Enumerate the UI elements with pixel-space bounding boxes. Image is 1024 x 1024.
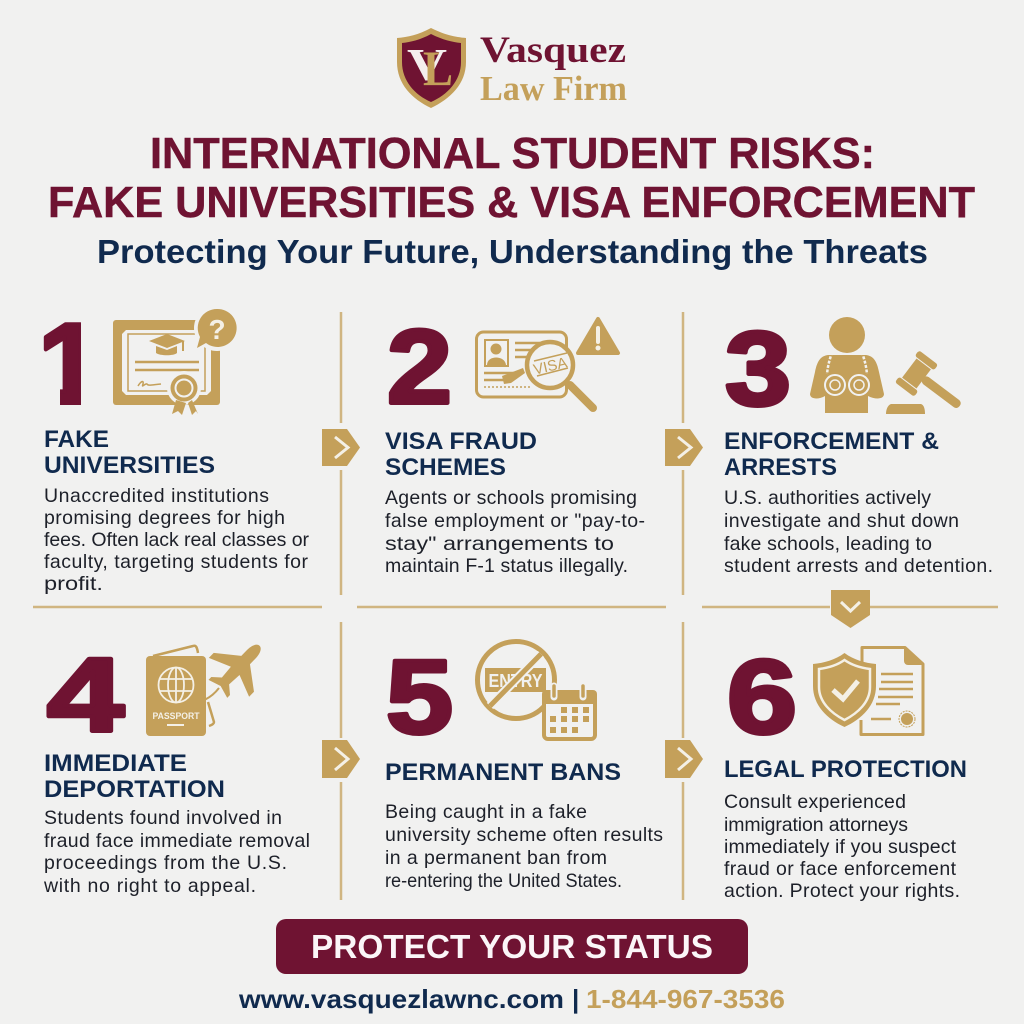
title: FAKE UNIVERSITIES & VISA ENFORCEMENT — [48, 178, 975, 227]
body text: in a permanent ban from — [385, 847, 607, 869]
panel: visa fraud schemes — [385, 309, 645, 577]
body text: fake schools, leading to — [724, 533, 932, 555]
number 5: 5 — [386, 639, 453, 756]
body text: student arrests and detention. — [724, 555, 993, 577]
body text — [724, 487, 993, 577]
brand name — [480, 30, 627, 108]
heading — [44, 426, 215, 479]
body text: fraud or face enforcement — [724, 858, 957, 880]
panel: fake universities — [38, 301, 310, 595]
heading: UNIVERSITIES — [44, 452, 215, 479]
body text: university scheme often results — [385, 824, 663, 846]
panel: enforcement and arrests — [724, 311, 993, 577]
body text: faculty, targeting students for — [44, 551, 308, 573]
number 6: 6 — [727, 639, 797, 756]
panel: legal protection — [724, 639, 967, 902]
body text: with no right to appeal. — [43, 875, 256, 897]
icon: no entry and calendar — [478, 642, 597, 739]
contact line: | — [572, 984, 579, 1014]
heading: PERMANENT BANS — [385, 759, 621, 786]
heading: ENFORCEMENT & — [724, 428, 939, 455]
body text: investigate and shut down — [724, 510, 959, 532]
body text — [724, 791, 960, 902]
icon: passport and plane: PASSPORT — [152, 711, 200, 721]
body text: promising degrees for high — [44, 507, 285, 529]
call to action button: PROTECT YOUR STATUS — [311, 928, 713, 965]
icon: diploma with question bubble: ? — [208, 314, 226, 345]
arrow: 1 to 2 — [322, 429, 360, 466]
body text: Being caught in a fake — [385, 801, 587, 823]
arrow: 5 to 6 — [665, 740, 703, 778]
icon: visa card and magnifier: VISA — [532, 354, 569, 379]
brand name: Law Firm — [480, 69, 627, 108]
body text: false employment or "pay-to- — [385, 510, 645, 532]
body text: re-entering the United States. — [385, 870, 622, 892]
arrow: 4 to 5 — [322, 740, 360, 778]
number 3: 3 — [725, 311, 791, 428]
heading: ARRESTS — [724, 454, 837, 481]
body text: maintain F-1 status illegally. — [385, 555, 628, 577]
logo — [397, 28, 627, 108]
icon: no entry and calendar: ENTRY — [488, 671, 542, 691]
body text: Agents or schools promising — [385, 487, 637, 509]
title: INTERNATIONAL STUDENT RISKS: — [150, 129, 875, 178]
contact line: www.vasquezlawnc.com — [238, 984, 564, 1014]
subtitle: Protecting Your Future, Understanding the Threats — [97, 233, 928, 270]
body text: immigration attorneys — [724, 814, 908, 836]
call to action button — [276, 919, 748, 974]
contact line: 1-844-967-3536 — [586, 984, 785, 1014]
body text: fraud face immediate removal — [44, 830, 310, 852]
title — [48, 129, 975, 227]
number 1: 1 — [38, 301, 101, 428]
icon: VL shield: L — [423, 40, 453, 96]
number 4: 4 — [47, 637, 124, 754]
heading: IMMEDIATE — [44, 750, 187, 777]
body text: immediately if you suspect — [724, 836, 957, 858]
panel: immediate deportation — [43, 626, 310, 897]
body text: action. Protect your rights. — [724, 880, 960, 902]
body text: profit. — [44, 573, 103, 595]
icon: handcuffed person and gavel — [810, 317, 972, 422]
icon: shield and document — [813, 647, 923, 734]
heading: VISA FRAUD — [385, 428, 537, 455]
heading: FAKE — [44, 426, 109, 453]
heading: LEGAL PROTECTION — [724, 756, 967, 783]
contact line — [238, 984, 785, 1014]
body text: U.S. authorities actively — [724, 487, 931, 509]
heading — [385, 428, 537, 481]
heading: DEPORTATION — [44, 776, 225, 803]
heading — [724, 428, 939, 481]
body text: Unaccredited institutions — [44, 485, 269, 507]
body text: Consult experienced — [724, 791, 906, 813]
body text: Students found involved in — [44, 807, 282, 829]
heading — [44, 750, 225, 803]
icon: VL shield: V — [407, 39, 447, 90]
panel: permanent bans — [385, 639, 663, 892]
number 2: 2 — [387, 309, 452, 426]
body text: stay" arrangements to — [385, 533, 614, 555]
icon: visa card and magnifier — [476, 319, 618, 408]
body text — [44, 485, 310, 595]
body text: fees. Often lack real classes or — [44, 529, 310, 551]
icon: VL shield — [397, 28, 466, 108]
body text — [385, 487, 645, 577]
body text: proceedings from the U.S. — [44, 852, 287, 874]
body text — [43, 807, 310, 897]
brand name: Vasquez — [480, 30, 626, 71]
arrow: 3 down to 6 — [831, 590, 870, 628]
arrow: 2 to 3 — [665, 429, 703, 466]
icon: passport and plane — [146, 626, 280, 736]
icon: diploma with question bubble — [113, 305, 240, 415]
body text — [385, 801, 663, 892]
heading: SCHEMES — [385, 454, 506, 481]
